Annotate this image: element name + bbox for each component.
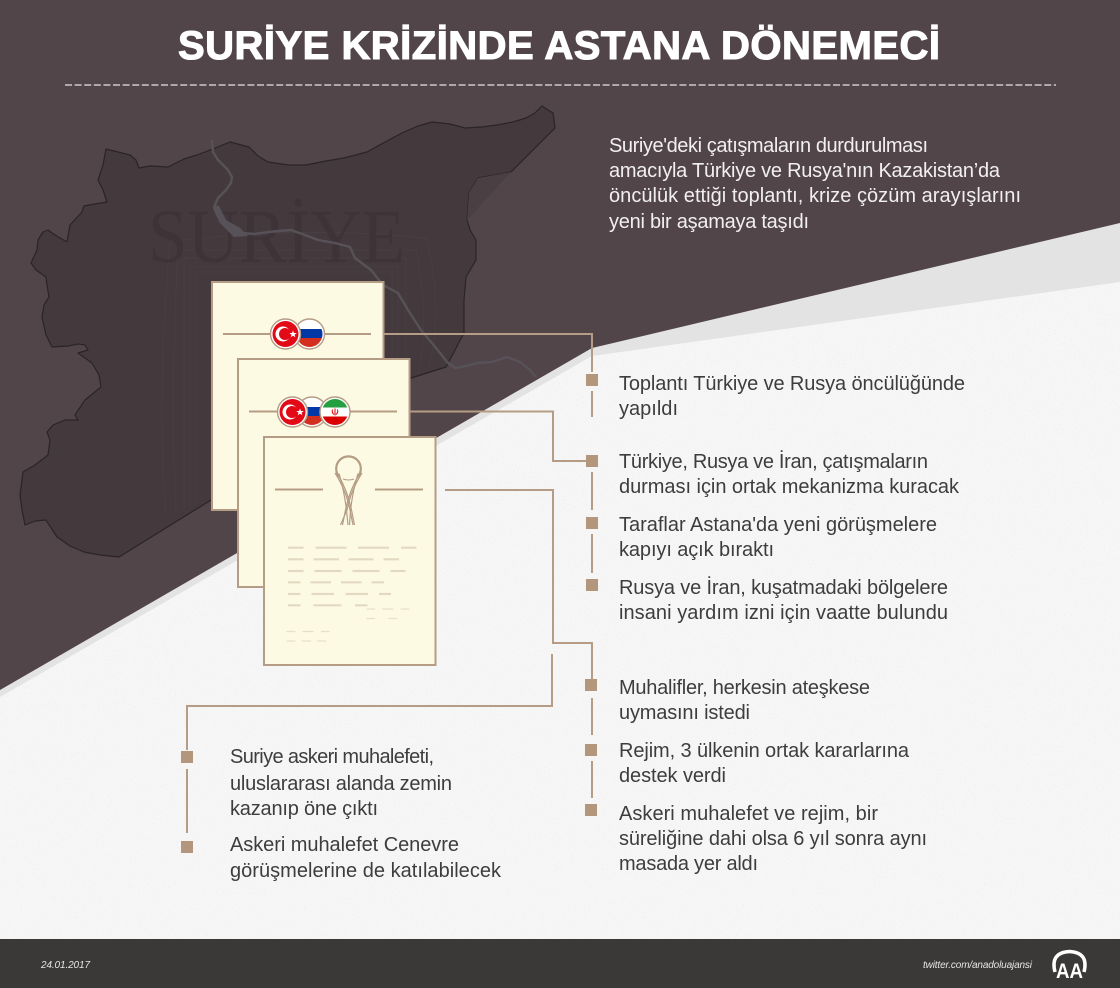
map of Syria — [20, 106, 555, 557]
footer bar — [0, 939, 1120, 988]
text 2: Rejim, 3 ülkenin ortak kararlarına — [619, 740, 910, 762]
river — [212, 140, 536, 377]
marker 3 — [585, 804, 597, 816]
flags: Russia — [294, 319, 324, 349]
marker 2 — [586, 517, 598, 529]
signature rule — [249, 410, 397, 412]
intro text: Suriye'deki çatışmaların durdurulması — [609, 135, 928, 157]
bullet marker — [586, 374, 598, 386]
text 1 — [619, 450, 960, 498]
bullet group: Turkey, Russia and Iran — [586, 450, 960, 624]
text 3: insani yardım izni için vaatte bulundu — [619, 602, 948, 624]
text 2: Askeri muhalefet Cenevre — [230, 834, 459, 856]
intro text: yeni bir aşamaya taşıdı — [609, 211, 809, 233]
text 2 — [619, 740, 910, 787]
marker 1 — [181, 751, 193, 763]
bullet group: Turkey and Russia — [586, 373, 965, 420]
marker 1 — [585, 679, 597, 691]
icon: Anadolu Agency logo — [1054, 952, 1085, 983]
title: SURİYE KRİZİNDE ASTANA DÖNEMECİ — [178, 23, 940, 68]
marker 2 — [181, 841, 193, 853]
flags: Turkey — [270, 319, 300, 349]
text 1 — [230, 746, 452, 820]
map notch shade — [467, 172, 511, 220]
text 3: Askeri muhalefet ve rejim, bir — [619, 803, 878, 825]
light lower panel — [0, 223, 1120, 940]
text 1: Türkiye, Rusya ve İran, çatışmaların — [619, 450, 928, 473]
text 1 — [619, 677, 870, 724]
bullet text — [619, 373, 965, 420]
text 3 — [619, 803, 927, 875]
text 1: kazanıp öne çıktı — [230, 798, 378, 820]
marker 1 — [586, 455, 598, 467]
text 2: Taraflar Astana'da yeni görüşmelere — [619, 514, 937, 536]
sheet — [238, 359, 410, 587]
sheet — [264, 437, 436, 665]
text 2 — [230, 834, 502, 882]
text 1: Muhalifler, herkesin ateşkese — [619, 677, 870, 699]
connector lines — [187, 334, 592, 833]
title dashed rule — [65, 84, 1056, 86]
text 2 — [619, 514, 937, 561]
marker 2 — [585, 744, 597, 756]
grey angled band — [0, 223, 1120, 710]
flags: Iran — [320, 397, 350, 427]
text 1: Suriye askeri muhalefeti, — [230, 746, 434, 768]
signature rules — [275, 488, 423, 490]
flags: Turkey — [278, 397, 308, 427]
document 3 — [264, 437, 436, 665]
text 2: görüşmelerine de katılabilecek — [230, 860, 502, 882]
dark background panel — [0, 0, 1120, 700]
white area — [0, 282, 1120, 940]
map silhouette — [20, 106, 555, 557]
text 2: destek verdi — [619, 765, 726, 787]
document 2 — [238, 359, 410, 587]
twitter handle: twitter.com/anadoluajansi — [923, 960, 1033, 971]
intro text: öncülük ettiği toplantı, krize çözüm arayışlarını — [609, 185, 1021, 207]
intro text: amacıyla Türkiye ve Rusya'nın Kazakistan’da — [609, 160, 1001, 182]
icon: Astana trophy — [335, 456, 362, 525]
marker 3 — [586, 579, 598, 591]
flags: Russia — [302, 396, 324, 428]
text 3: süreliğine dahi olsa 6 yıl sonra aynı — [619, 828, 927, 850]
text 2: kapıyı açık bıraktı — [619, 539, 774, 561]
text 3: masada yer aldı — [619, 853, 758, 875]
bullet text: Toplantı Türkiye ve Rusya öncülüğünde — [619, 373, 965, 395]
document text placeholder lines — [286, 548, 416, 641]
text 3: Rusya ve İran, kuşatmadaki bölgelere — [619, 576, 948, 599]
document 1 — [212, 282, 384, 510]
signature rule — [223, 333, 371, 335]
text 1: durması için ortak mekanizma kuracak — [619, 476, 960, 498]
text 3 — [619, 576, 948, 624]
paper speckle texture — [0, 280, 1120, 940]
intro text — [609, 135, 1021, 233]
bullet group: Astana opposition and regime — [585, 677, 927, 875]
date: 24.01.2017 — [40, 960, 90, 971]
text 1: uymasını istedi — [619, 702, 750, 724]
sheet — [212, 282, 384, 510]
icon: Anadolu Agency logo: AA — [1056, 960, 1083, 983]
bullet group: Syrian armed opposition — [181, 746, 502, 882]
text 1: uluslararası alanda zemin — [230, 773, 452, 795]
map contour lines — [162, 232, 436, 515]
bullet text: yapıldı — [619, 398, 678, 420]
map label: SURİYE: SURİYE — [148, 195, 405, 279]
